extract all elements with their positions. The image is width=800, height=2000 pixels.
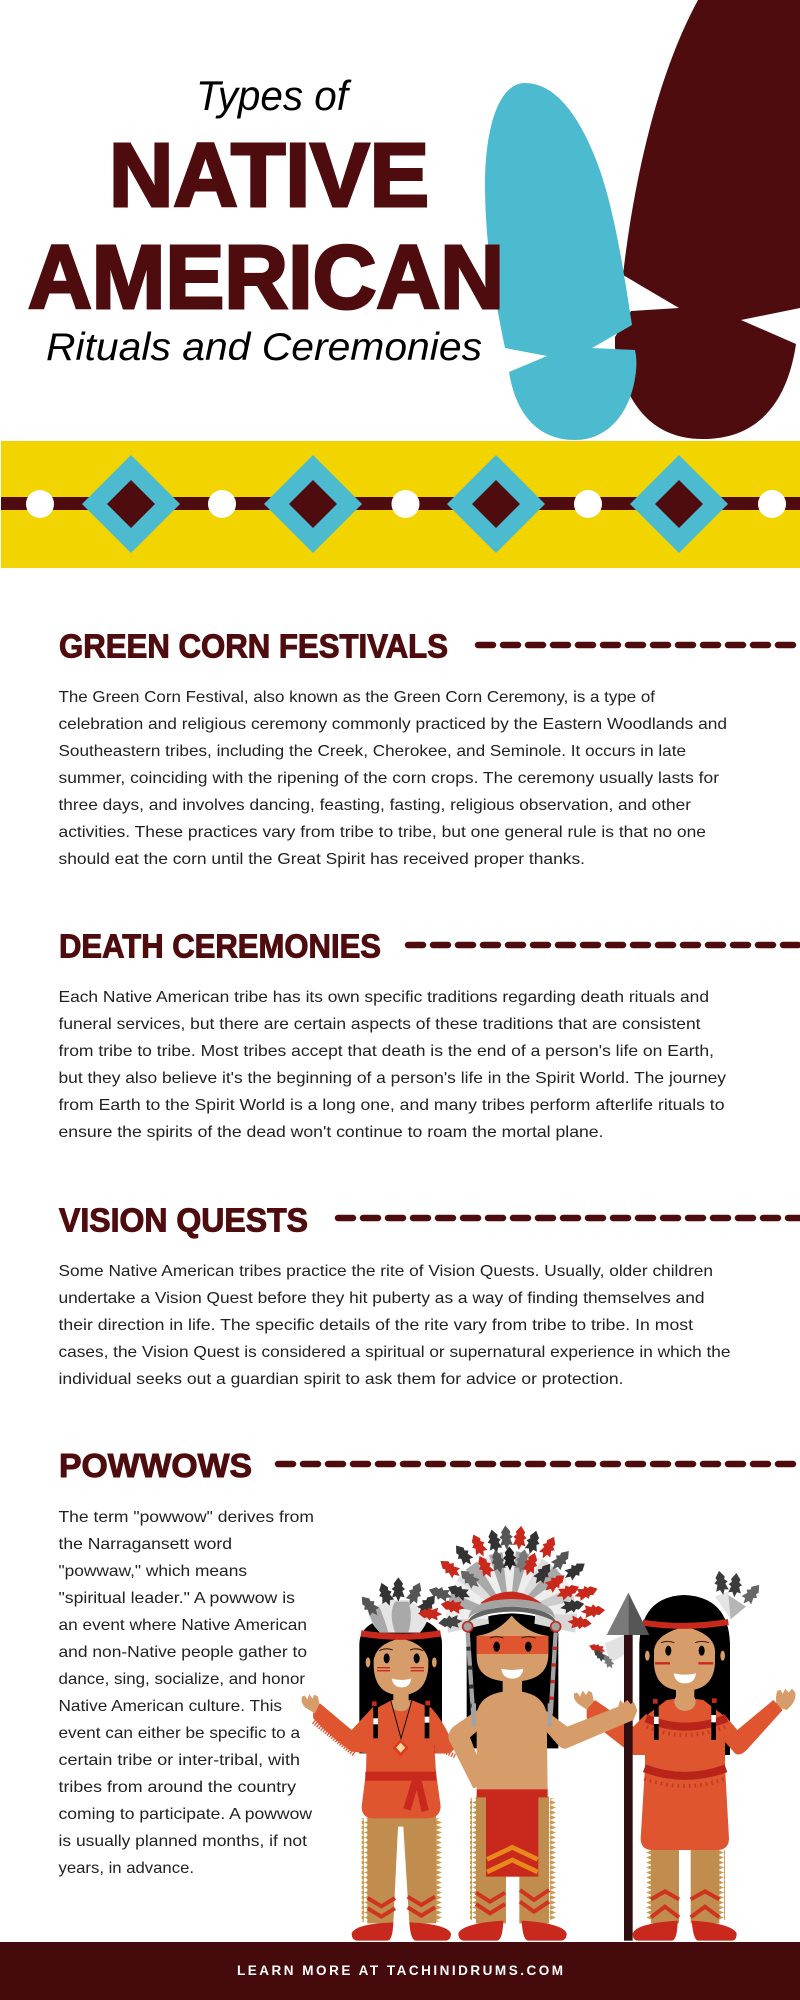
body text bbox=[58, 1263, 731, 1388]
body text: individual seeks out a guardian spirit to ask them for advice or protection. bbox=[58, 1371, 624, 1388]
body text bbox=[58, 1509, 314, 1877]
figure: chief in headdress bbox=[418, 1525, 637, 1941]
teal feather bbox=[485, 83, 636, 440]
body text: cases, the Vision Quest is considered a spiritual or supernatural experience in which the bbox=[58, 1344, 731, 1361]
body text bbox=[58, 989, 726, 1141]
body text: from Earth to the Spirit World is a long one, and many tribes perform afterlife rituals to bbox=[58, 1097, 725, 1114]
body text: Some Native American tribes practice the rite of Vision Quests. Usually, older children bbox=[58, 1263, 713, 1280]
body text: is usually planned months, if not bbox=[58, 1833, 308, 1850]
body text: and non-Native people gather to bbox=[58, 1644, 307, 1661]
body text: Native American culture. This bbox=[58, 1698, 282, 1715]
body text: "powwaw," which means bbox=[58, 1563, 247, 1580]
body text: years, in advance. bbox=[58, 1860, 194, 1877]
body text: from tribe to tribe. Most tribes accept that death is the end of a person's life on Earth, bbox=[58, 1043, 714, 1060]
body text: activities. These practices vary from tribe to tribe, but one general rule is that no one bbox=[58, 824, 706, 841]
body text: funeral services, but there are certain aspects of these traditions that are consistent bbox=[58, 1016, 701, 1033]
body text: their direction in life. The specific details of the rite vary from tribe to tribe. In most bbox=[58, 1317, 694, 1334]
body text: celebration and religious ceremony commonly practiced by the Eastern Woodlands and bbox=[58, 716, 727, 733]
body text: ensure the spirits of the dead won't continue to roam the mortal plane. bbox=[58, 1124, 604, 1141]
body text: but they also believe it's the beginning of a person's life in the Spirit World. The journey bbox=[58, 1070, 726, 1087]
illustration: three figures bbox=[301, 1525, 795, 1941]
title line: Rituals and Ceremonies: Rituals and Ceremonies bbox=[46, 326, 482, 369]
decorative yellow band with diamonds bbox=[1, 441, 800, 568]
body text: an event where Native American bbox=[58, 1617, 307, 1634]
footer text: LEARN MORE AT TACHINIDRUMS.COM bbox=[237, 1963, 563, 1978]
title line: NATIVE: NATIVE bbox=[109, 126, 429, 226]
body text: tribes from around the country bbox=[58, 1779, 296, 1796]
heading: VISION QUESTS bbox=[59, 1202, 308, 1238]
heading: POWWOWS bbox=[59, 1447, 252, 1484]
body text: "spiritual leader." A powwow is bbox=[58, 1590, 295, 1607]
body text: coming to participate. A powwow bbox=[58, 1806, 312, 1823]
title line: AMERICAN: AMERICAN bbox=[28, 228, 504, 328]
body text: certain tribe or inter-tribal, with bbox=[58, 1752, 300, 1769]
heading: GREEN CORN FESTIVALS bbox=[59, 628, 448, 664]
panel: Death Ceremonies bbox=[58, 928, 800, 1141]
spear bbox=[588, 1593, 649, 1941]
body text: three days, and involves dancing, feasting, fasting, religious observation, and other bbox=[58, 797, 692, 814]
figure: right woman bbox=[574, 1570, 795, 1941]
dark feather bbox=[615, 0, 800, 439]
body text: Each Native American tribe has its own specific traditions regarding death rituals and bbox=[58, 989, 709, 1006]
body text: Southeastern tribes, including the Creek, Cherokee, and Seminole. It occurs in late bbox=[58, 743, 686, 760]
panel: Green Corn Festivals bbox=[58, 628, 797, 868]
body text: should eat the corn until the Great Spirit has received proper thanks. bbox=[58, 851, 585, 868]
title bbox=[28, 72, 504, 369]
body text: undertake a Vision Quest before they hit puberty as a way of finding themselves and bbox=[58, 1290, 704, 1307]
figure: left girl bbox=[301, 1577, 455, 1941]
body text: the Narragansett word bbox=[58, 1536, 232, 1553]
body text: summer, coinciding with the ripening of the corn crops. The ceremony usually lasts for bbox=[58, 770, 720, 787]
body text bbox=[58, 689, 727, 868]
body text: The term "powwow" derives from bbox=[58, 1509, 314, 1526]
icon: feather headdress bbox=[418, 1525, 606, 1633]
body text: The Green Corn Festival, also known as the Green Corn Ceremony, is a type of bbox=[58, 689, 656, 706]
panel: Vision Quests bbox=[58, 1202, 800, 1388]
body text: event can either be specific to a bbox=[58, 1725, 300, 1742]
heading: DEATH CEREMONIES bbox=[59, 928, 381, 964]
body text: dance, sing, socialize, and honor bbox=[58, 1671, 306, 1688]
footer bar bbox=[0, 1942, 800, 2000]
title line: Types of: Types of bbox=[196, 72, 352, 119]
panel: Powwows bbox=[58, 1447, 797, 1877]
